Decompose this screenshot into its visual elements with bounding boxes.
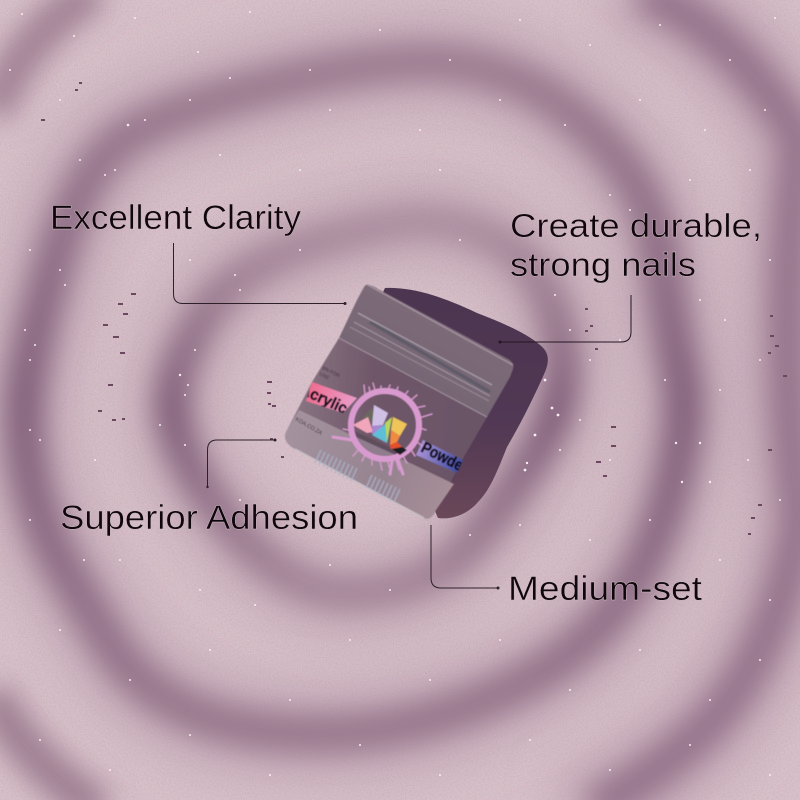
jar: USE	[318, 371, 331, 382]
callout: Superior Adhesion: Superior Adhesion	[60, 499, 358, 537]
powder band	[416, 440, 464, 474]
powder band: Powder	[418, 439, 470, 477]
callout: Create durable, strong nails	[498, 207, 762, 344]
jar body	[285, 338, 487, 519]
callout: Create durable, strong nails: Create durable,	[510, 207, 762, 244]
jar lid	[339, 285, 513, 417]
logo: coloured facets	[353, 405, 407, 455]
jar	[285, 285, 513, 519]
callout: Medium-set	[431, 525, 703, 608]
dark powder flecks	[41, 82, 787, 535]
base grip lines	[315, 450, 400, 502]
callout: Superior Adhesion	[60, 438, 358, 537]
jar base	[285, 410, 454, 519]
lid ridges	[295, 285, 513, 518]
callout: Excellent Clarity: Excellent Clarity	[50, 199, 301, 237]
small print: BN FOR	[321, 365, 341, 380]
acrylic band: Acrylic	[297, 381, 350, 418]
acrylic band	[306, 382, 358, 414]
jar shadow	[360, 288, 548, 518]
callout: Medium-set: Medium-set	[508, 570, 703, 608]
callout: Excellent Clarity	[50, 199, 346, 305]
jar: KOA.CO.ZA	[294, 417, 323, 437]
logo splash ring	[333, 383, 432, 474]
callout: Create durable, strong nails: strong nails	[510, 246, 696, 283]
